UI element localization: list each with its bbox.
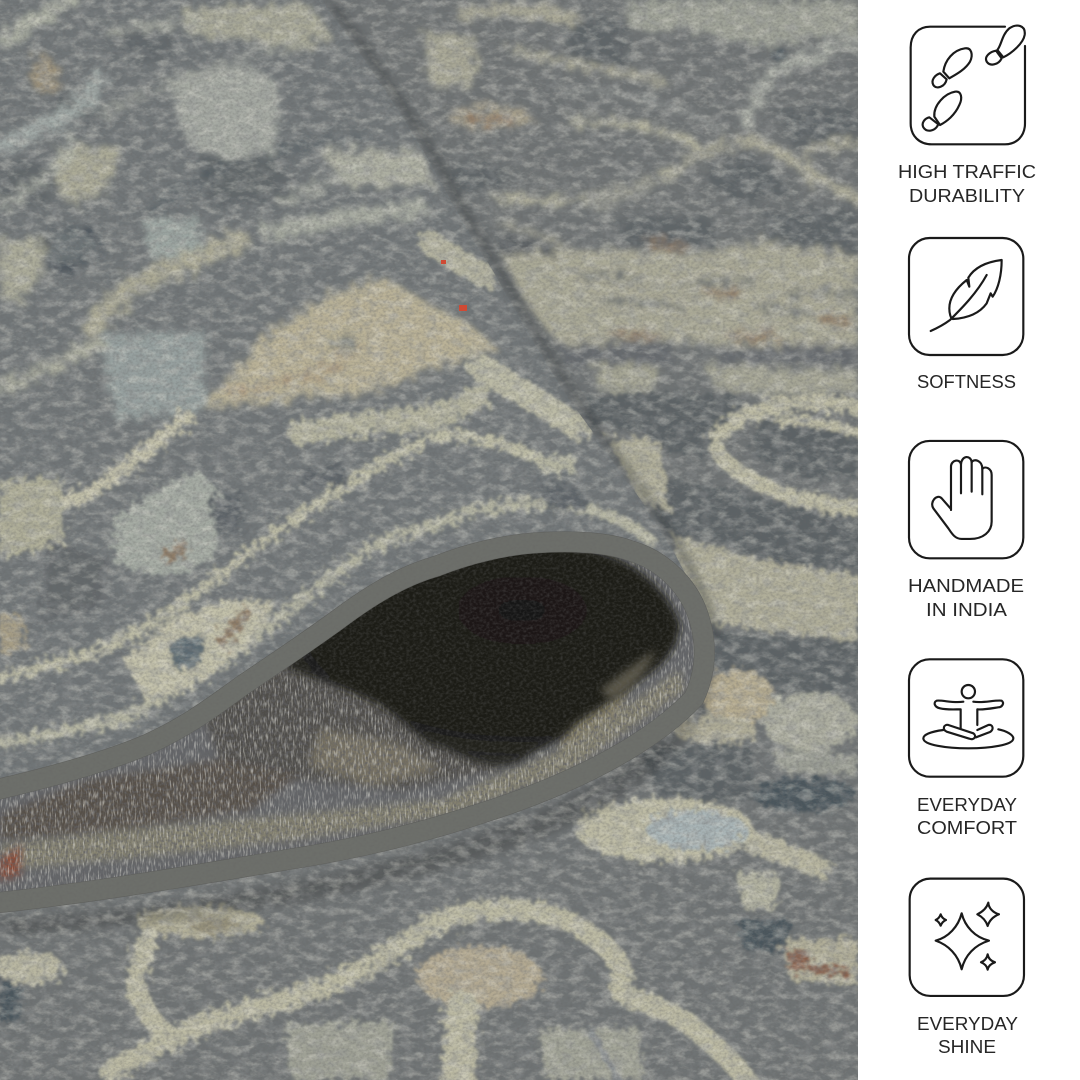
label: high traffic durability: DURABILITY bbox=[909, 186, 1025, 206]
label: everyday comfort: EVERYDAY bbox=[917, 795, 1017, 815]
label: handmade in india: IN INDIA bbox=[926, 600, 1007, 620]
rug floor layer bbox=[0, 0, 858, 1080]
photo: rolled rug bbox=[0, 0, 858, 1080]
rug bound edge rim bbox=[0, 542, 704, 903]
label: everyday shine: EVERYDAY bbox=[917, 1014, 1018, 1034]
label: softness: SOFTNESS bbox=[917, 372, 1016, 392]
grain texture bbox=[0, 0, 858, 1080]
feature: everyday comfort bbox=[909, 659, 1023, 838]
label: everyday shine: SHINE bbox=[938, 1037, 996, 1057]
shadow under roll bbox=[0, 660, 716, 935]
label: high traffic durability: HIGH TRAFFIC bbox=[898, 162, 1036, 182]
feature: handmade in india bbox=[908, 441, 1024, 620]
roll edge shadow bbox=[330, 0, 718, 640]
label: everyday comfort: COMFORT bbox=[917, 818, 1017, 838]
pile mottling over rug surface bbox=[0, 0, 858, 1080]
rug underside and dark hollow bbox=[0, 552, 694, 892]
feature: softness bbox=[909, 238, 1023, 392]
feature: everyday shine bbox=[910, 879, 1024, 1057]
icon: footprints bbox=[911, 26, 1025, 144]
label: handmade in india: HANDMADE bbox=[908, 576, 1024, 596]
icon: hand bbox=[909, 441, 1023, 558]
icon: feather bbox=[909, 238, 1023, 355]
woven thread texture bbox=[0, 669, 684, 882]
icon: sparkles bbox=[910, 879, 1024, 996]
icon: meditating figure bbox=[909, 659, 1023, 777]
rug roll top surface bbox=[0, 0, 684, 752]
feature: high traffic durability bbox=[898, 26, 1036, 206]
red fleck details bbox=[441, 260, 467, 311]
